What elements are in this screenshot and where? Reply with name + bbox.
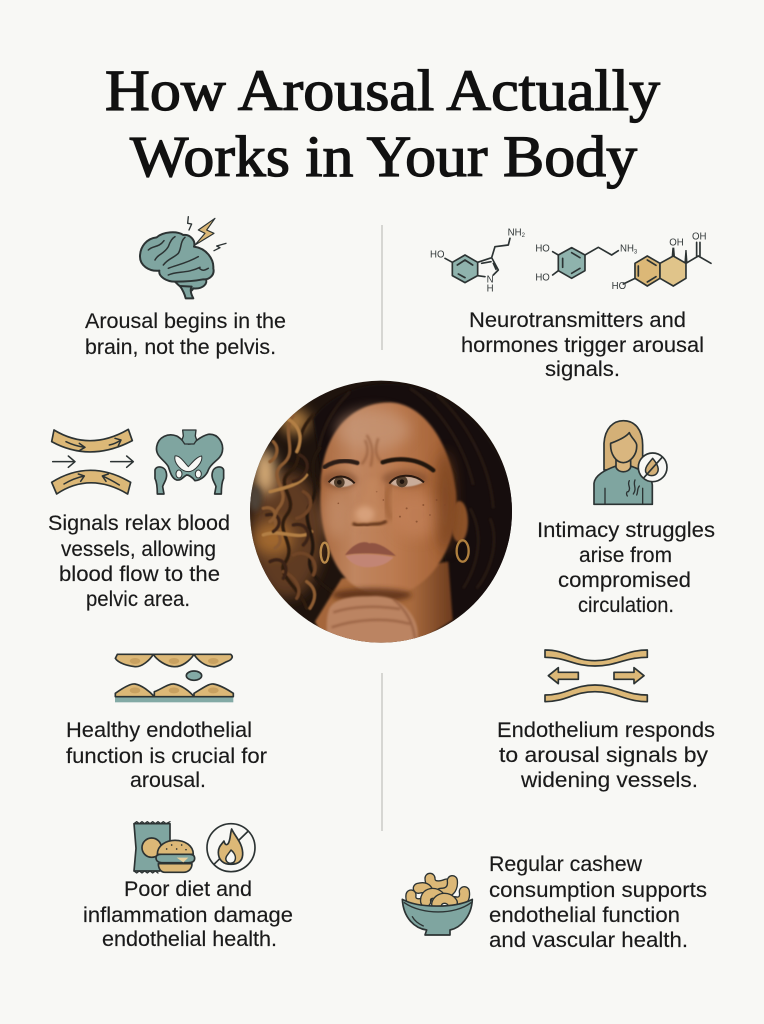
nose (351, 483, 392, 526)
photo: worried woman portrait (248, 375, 520, 645)
text: widening vessels (497, 718, 715, 792)
icon: no inflammation flame (207, 824, 255, 872)
eye sockets (323, 471, 357, 489)
text: healthy endothelium: Healthy endothelial (66, 718, 252, 742)
icon: bowl of cashews (402, 878, 472, 935)
title: Works in Your Body (130, 124, 637, 189)
text: cashews: Regular cashew (489, 852, 642, 876)
text: widening vessels: widening vessels. (520, 768, 698, 792)
title (105, 58, 660, 189)
text: poor diet: Poor diet and (124, 877, 252, 901)
neck (315, 562, 453, 643)
panel: healthy endothelium (66, 654, 267, 792)
icon: molecules: HO (612, 281, 627, 292)
text: widening vessels: Endothelium responds (497, 718, 715, 742)
panel: widening vessels (497, 650, 715, 792)
text: healthy endothelium: arousal. (130, 768, 206, 792)
lips (345, 542, 396, 567)
icon: molecules: OH (669, 238, 684, 249)
text: intimacy: Intimacy struggles (537, 518, 715, 542)
hand (327, 596, 418, 645)
panel: brain (85, 217, 286, 359)
icon: pelvis (155, 430, 224, 494)
text: intimacy: arise from (579, 543, 672, 567)
face (320, 402, 456, 602)
icon: molecules: N (487, 275, 494, 286)
text: brain: Arousal begins in the (85, 309, 286, 333)
earrings (457, 540, 469, 562)
text: widening vessels: to arousal signals by (499, 743, 708, 767)
text: blood vessels (48, 511, 230, 611)
title: How Arousal Actually (105, 58, 660, 123)
eyes (329, 476, 424, 488)
ear (451, 501, 468, 542)
text: poor diet: inflammation damage (83, 903, 293, 927)
icon: endothelial cells (115, 654, 233, 702)
icon: molecules: H (487, 284, 494, 295)
text: cashews (489, 852, 707, 952)
text: intimacy (537, 518, 715, 617)
hair (263, 384, 517, 622)
icon: relaxing blood vessels (52, 429, 133, 494)
panel: intimacy struggles (537, 421, 715, 617)
icon: molecules: HO (430, 250, 445, 261)
text: cashews: endothelial function (489, 903, 680, 927)
text: cashews: consumption supports (489, 878, 707, 902)
icon: molecules (430, 227, 711, 295)
text: intimacy: compromised (558, 568, 691, 592)
icon: woman with no-drop badge (594, 421, 667, 504)
panel: poor diet (83, 822, 293, 951)
text: healthy endothelium: function is crucial for (66, 744, 267, 768)
text: blood vessels: vessels, allowing (61, 537, 216, 561)
text: neurotransmitters: Neurotransmitters and (469, 308, 686, 332)
text: healthy endothelium (66, 718, 267, 792)
panel: cashews (402, 852, 707, 952)
text: neurotransmitters (461, 308, 704, 381)
icon: widening vessel (545, 650, 647, 702)
panel: blood vessels (48, 429, 230, 611)
freckles (337, 491, 446, 523)
text: blood vessels: Signals relax blood (48, 511, 230, 535)
text: poor diet: endothelial health. (102, 927, 277, 951)
text: blood vessels: blood flow to the (59, 562, 220, 586)
text: neurotransmitters: hormones trigger arousal (461, 333, 704, 357)
forehead creases (362, 435, 382, 467)
text: blood vessels: pelvic area. (86, 587, 190, 611)
icon: molecules: OH (692, 231, 706, 242)
icon: molecules: HO (535, 273, 550, 284)
icon: molecules: HO (535, 244, 550, 255)
icon: molecules: NH (620, 244, 634, 255)
icon: molecules: 2 (522, 233, 526, 239)
panel: neurotransmitters (430, 227, 711, 381)
brows (325, 461, 357, 467)
icon: brain with lightning (140, 217, 226, 298)
icon: molecules: 3 (634, 249, 638, 255)
icon: snack bag and burger (134, 822, 195, 873)
text: brain (85, 309, 286, 359)
text: poor diet (83, 877, 293, 951)
text: cashews: and vascular health. (489, 928, 688, 952)
icon: molecules: NH (508, 227, 522, 238)
text: brain: brain, not the pelvis. (85, 335, 276, 359)
text: intimacy: circulation. (578, 593, 674, 617)
text: neurotransmitters: signals. (545, 357, 620, 381)
